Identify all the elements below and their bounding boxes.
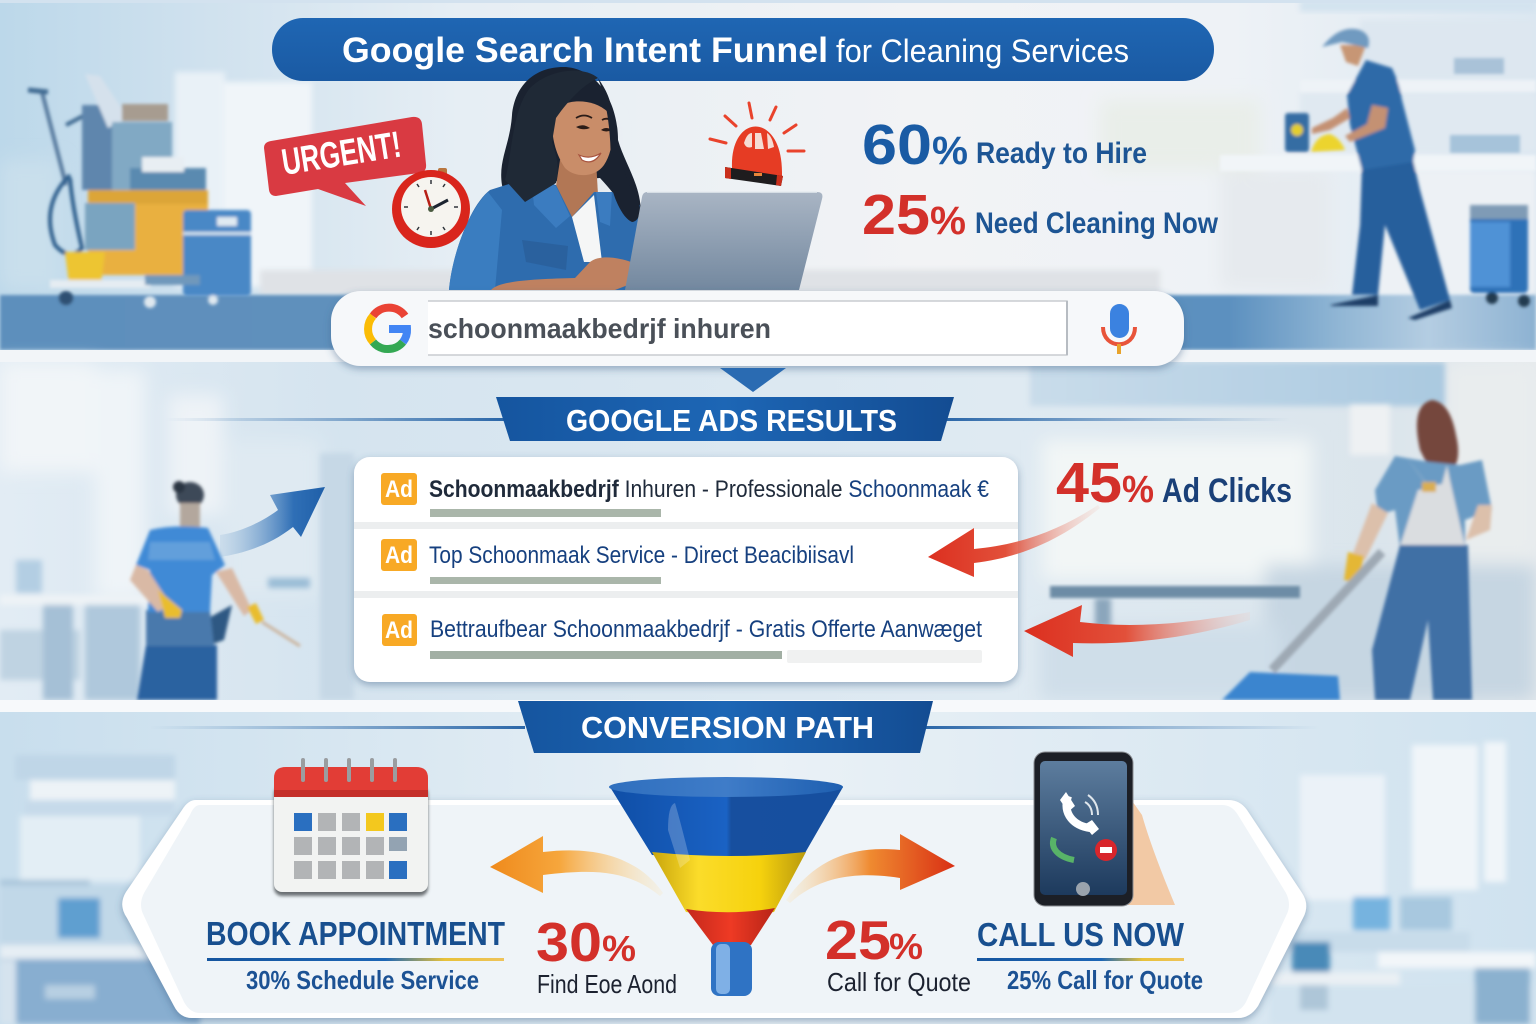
- title banner: Google Search Intent Funnel: [342, 31, 828, 70]
- icon: calendar: [274, 758, 428, 896]
- text: call us now: [977, 916, 1203, 995]
- heading: google ads results: [165, 397, 1290, 441]
- ad row 1: [381, 473, 990, 517]
- funnel: [609, 777, 843, 996]
- scene: cleaner with broom, middle left: [130, 481, 300, 700]
- text: book appointment: [206, 915, 505, 995]
- head and cap: [1340, 45, 1366, 66]
- arrow: red to ad row 2: [928, 505, 1100, 577]
- title banner: [272, 18, 1214, 81]
- ad row 3: [382, 614, 982, 663]
- stat: 25%: 25: [825, 909, 891, 971]
- title banner: for Cleaning Services: [836, 33, 1129, 69]
- stat: 45% ad clicks: %: [1122, 469, 1154, 511]
- ad row 1: Schoonmaakbedrjf Inhuren - Professionale Schoonmaak €: [429, 476, 990, 503]
- stat: 60% ready to hire: 60: [862, 113, 932, 177]
- urgent speech bubble: URGENT!: [279, 124, 404, 183]
- urgent speech bubble: [264, 117, 426, 206]
- search bar: [331, 291, 1184, 366]
- stat: 60% ready to hire: Ready to Hire: [976, 137, 1147, 170]
- heading: google ads results: GOOGLE ADS RESULTS: [566, 403, 897, 438]
- search query: schoonmaakbedrjf inhuren: [428, 313, 771, 344]
- stat: 45% ad clicks: 45: [1056, 451, 1122, 515]
- stat: 60% ready to hire: [862, 113, 1147, 177]
- panel: conversion path: [122, 752, 1306, 1018]
- arrow: orange-red right: [786, 834, 955, 903]
- ad row 1: Ad: [385, 476, 413, 503]
- stat: 30%: Find Eoe Aond: [537, 969, 677, 999]
- background: top section: [0, 0, 1536, 350]
- text: call us now: 25% Call for Quote: [1007, 965, 1203, 995]
- text: call us now: CALL US NOW: [977, 916, 1185, 953]
- text: book appointment: 30% Schedule Service: [246, 965, 479, 995]
- scene: cleaner mopping, middle right: [1222, 400, 1492, 700]
- scene: cleaner wiping counter, top right: [1220, 29, 1536, 320]
- icon: microphone: [1103, 304, 1135, 354]
- connector chevron: [720, 368, 786, 392]
- ad row 3: Bettraufbear Schoonmaakbedrjf - Gratis Offerte Aanwæget: [430, 616, 982, 643]
- stat: 30%: 30: [536, 911, 602, 973]
- heading: conversion path: [150, 701, 1320, 753]
- stat: 25%: [825, 909, 971, 997]
- stat: 25%: %: [889, 926, 923, 967]
- icon: google G: [368, 308, 407, 349]
- arms: [1312, 105, 1388, 142]
- legs: [1352, 160, 1450, 310]
- ad row 2: [381, 539, 854, 584]
- ad row 2: Top Schoonmaak Service - Direct Beacibiisavl: [429, 542, 854, 569]
- background: bottom section: [0, 712, 1536, 1024]
- arrow: blue to ads: [220, 487, 325, 557]
- ad row 3: Ad: [385, 617, 413, 644]
- stat: 25% need cleaning now: Need Cleaning Now: [975, 207, 1219, 240]
- illustration: woman with laptop: [449, 67, 822, 290]
- text: book appointment: BOOK APPOINTMENT: [206, 915, 505, 952]
- stat: 45% ad clicks: Ad Clicks: [1162, 472, 1292, 510]
- icon: stopwatch clock: [392, 168, 470, 248]
- torso: [1347, 60, 1415, 170]
- stat: 30%: [536, 911, 677, 999]
- arrow: red to ad row 3: [1024, 605, 1250, 657]
- ad row 2: Ad: [385, 542, 413, 569]
- stat: 45% ad clicks: [1056, 451, 1292, 515]
- stat: 60% ready to hire: %: [932, 129, 968, 173]
- stat: 25%: Call for Quote: [827, 967, 971, 997]
- heading: conversion path: CONVERSION PATH: [581, 710, 874, 745]
- stat: 30%: %: [602, 928, 636, 969]
- stat: 25% need cleaning now: %: [930, 199, 966, 243]
- stat: 25% need cleaning now: 25: [862, 183, 930, 247]
- icon: phone in hand: [1034, 752, 1175, 906]
- panel: ad results: [354, 457, 1018, 682]
- arrow: orange left: [490, 836, 663, 896]
- stat: 25% need cleaning now: [862, 183, 1219, 247]
- icon: red siren: [710, 103, 804, 186]
- white band separators: [0, 350, 1536, 712]
- scene: cleaning cart, left: [28, 74, 251, 308]
- background: middle section: [0, 362, 1536, 700]
